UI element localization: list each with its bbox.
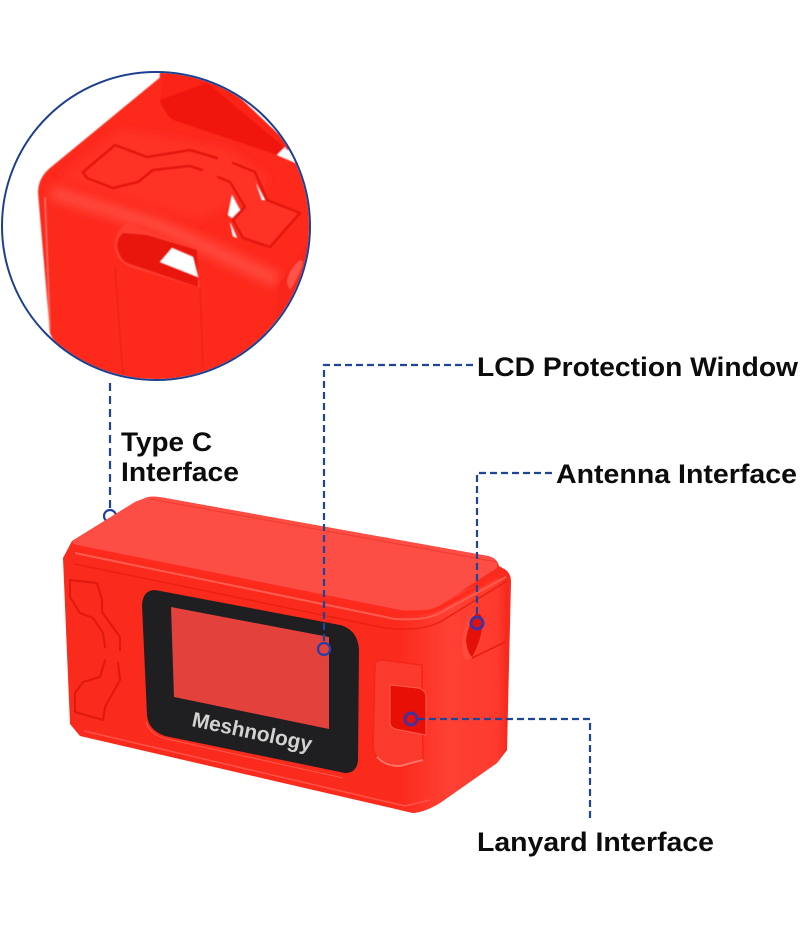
inset: white gap behind case [277, 147, 296, 163]
inset: rear part of case [158, 72, 292, 158]
label: Type C Interface: Type C [121, 427, 212, 457]
inset: top edge highlight [52, 192, 277, 280]
label: LCD Protection Window: LCD Protection Window [477, 352, 799, 382]
device: screen bezel [142, 590, 359, 773]
device: LCD window [171, 607, 329, 729]
device: top face [72, 497, 497, 611]
device: left logo relief [70, 580, 120, 720]
label: Antenna Interface: Antenna Interface [556, 459, 797, 489]
label: Type C Interface: Interface [121, 457, 239, 487]
label: Type C Interface [121, 427, 239, 487]
leader: Lanyard Interface [405, 713, 590, 822]
device: lid ridge [72, 546, 506, 613]
inset: Type C slot [115, 223, 200, 288]
inset: ring [2, 72, 310, 380]
device: lanyard recess [373, 660, 426, 768]
leader: Type C [104, 383, 116, 522]
label: Lanyard Interface: Lanyard Interface [477, 827, 714, 857]
leader: LCD Protection Window [318, 365, 473, 655]
device: Meshnology logo: Meshnology [190, 708, 314, 756]
inset: front face lines [45, 197, 50, 330]
inset: logo gaps [228, 183, 265, 238]
device: body silhouette [63, 497, 511, 813]
inset: raised logo right [218, 163, 300, 247]
device: right side face [400, 575, 508, 813]
device [63, 497, 511, 813]
device: bottom edge [84, 731, 430, 806]
inset: case body [37, 77, 309, 379]
inset: antenna side [275, 235, 320, 340]
device: antenna port [458, 611, 505, 661]
inset: raised logo left [83, 145, 217, 188]
leader: Antenna Interface [471, 473, 552, 629]
inset: magnified Type C corner [2, 72, 320, 400]
